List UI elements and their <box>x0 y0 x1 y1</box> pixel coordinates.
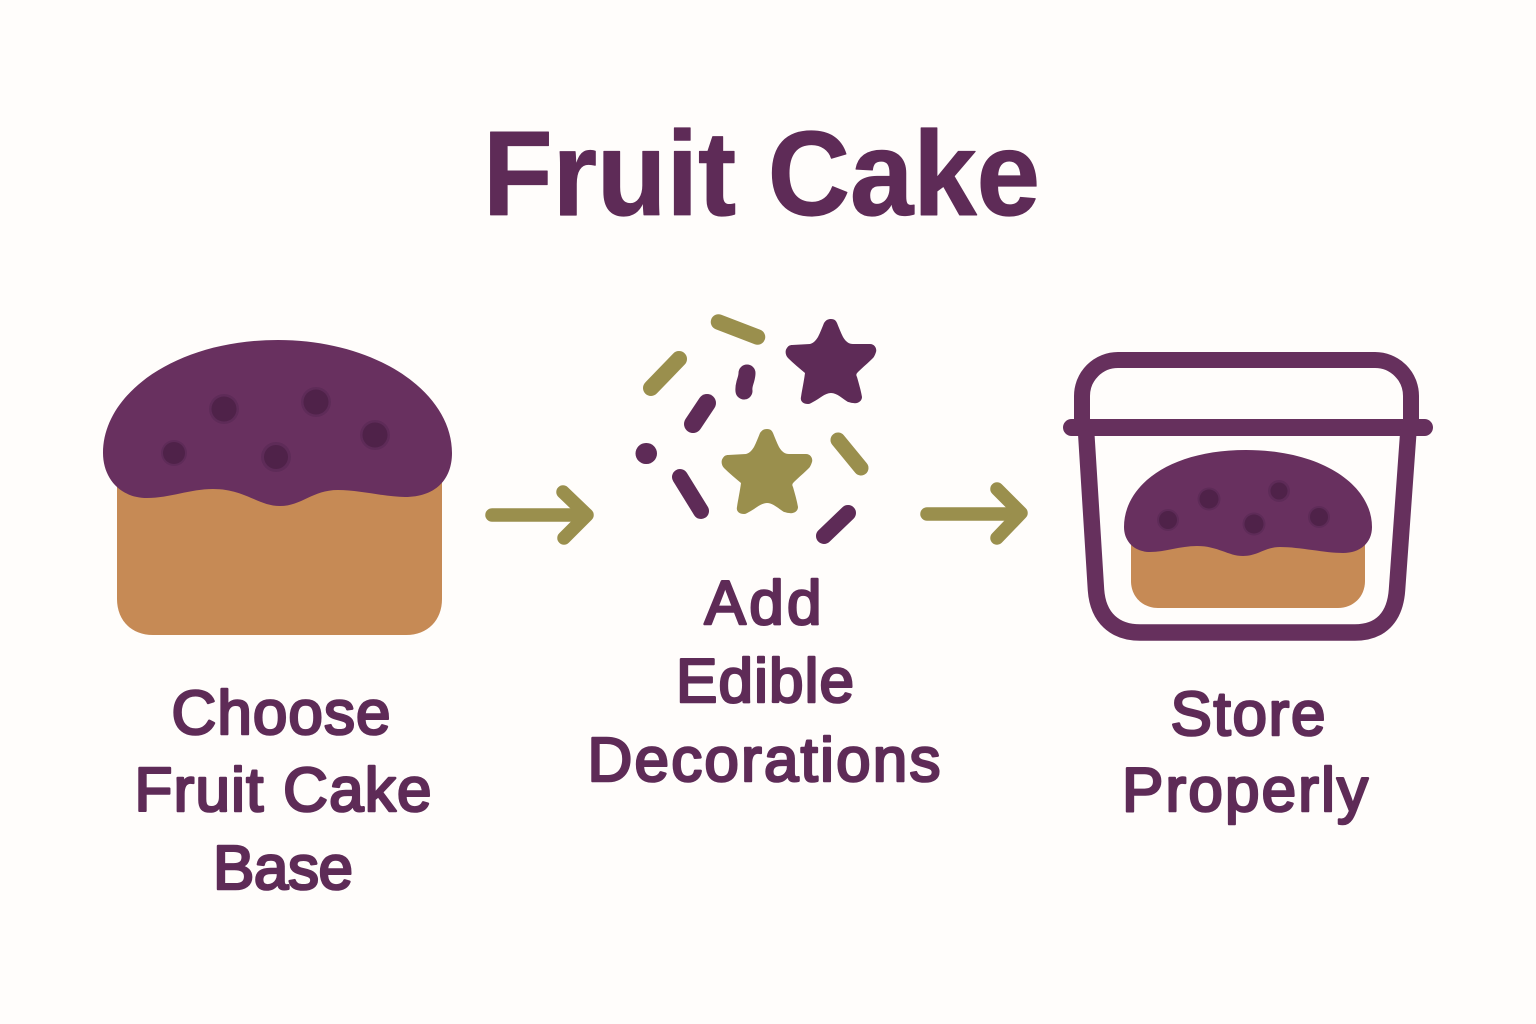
title: Fruit Cake <box>483 107 1040 241</box>
label: choose fruit cake base: Choose <box>172 679 390 748</box>
arrow: base to decorations <box>492 492 587 538</box>
label: choose fruit cake base: Fruit Cake <box>134 756 432 825</box>
label: add edible decorations: Decorations <box>588 726 940 795</box>
label: store properly <box>1122 680 1368 825</box>
label: add edible decorations: Add <box>704 569 822 638</box>
arrow: decorations to storage <box>927 489 1021 538</box>
icon: storage container with cake <box>1072 360 1424 632</box>
label: add edible decorations: Edible <box>676 647 854 716</box>
label: choose fruit cake base: Base <box>213 834 353 903</box>
label: store properly: Store <box>1170 680 1326 749</box>
label: add edible decorations <box>588 569 940 795</box>
icon: edible decorations <box>646 319 876 536</box>
icon: fruit cake base <box>103 340 452 635</box>
label: store properly: Properly <box>1122 756 1368 825</box>
label: choose fruit cake base <box>134 679 432 903</box>
